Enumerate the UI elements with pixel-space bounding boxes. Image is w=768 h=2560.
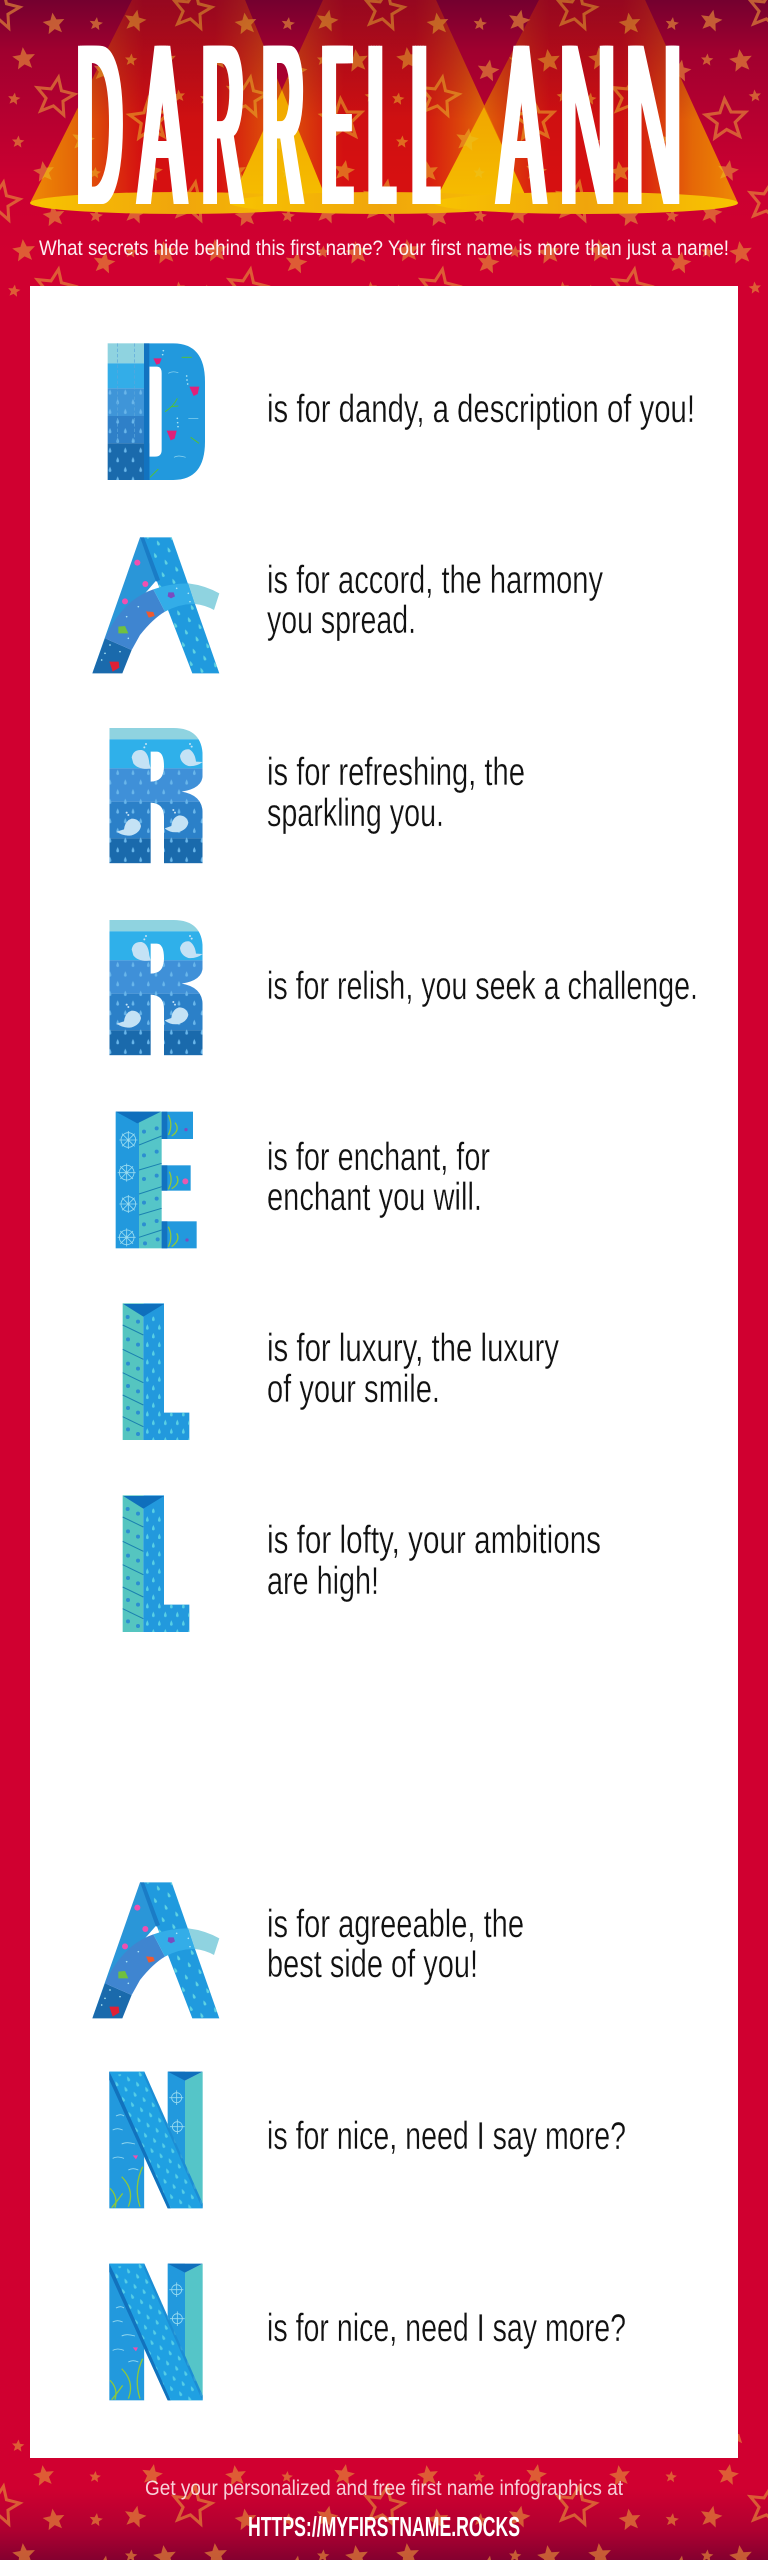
text: A: is for accord, the harmony <box>267 559 603 602</box>
text: E <box>267 1136 490 1219</box>
text: N: is for nice, need I say more? <box>267 2307 626 2350</box>
letter R illustration <box>109 728 203 863</box>
title: A <box>140 0 184 253</box>
text: E: is for enchant, for <box>267 1136 490 1179</box>
footer line: Get your personalized and free first name infographics at <box>145 2477 623 2500</box>
text: L <box>267 1327 559 1411</box>
text: A <box>267 1903 524 1986</box>
title: E <box>324 0 350 253</box>
title: A <box>499 0 543 253</box>
title: D <box>77 0 122 253</box>
title: R <box>203 0 243 253</box>
letter N illustration <box>109 2264 203 2400</box>
text: L: is for luxury, the luxury <box>267 1327 559 1370</box>
title: N <box>625 0 682 253</box>
text: A: you spread. <box>267 599 416 642</box>
title: L <box>414 0 437 253</box>
panel: white card <box>30 286 738 2458</box>
text: N: is for nice, need I say more? <box>267 2115 626 2158</box>
letter L illustration <box>123 1495 189 1632</box>
text: A <box>267 559 603 642</box>
title: L <box>370 0 393 253</box>
letter R illustration <box>109 920 203 1055</box>
footer url: HTTPS://MYFIRSTNAME.ROCKS <box>248 2511 520 2542</box>
text: R: sparkling you. <box>267 792 444 835</box>
text: A: is for agreeable, the <box>267 1903 524 1946</box>
text: L: are high! <box>267 1560 379 1603</box>
letter D illustration <box>108 343 205 480</box>
text: L <box>267 1519 601 1603</box>
text: E: enchant you will. <box>267 1176 482 1219</box>
text: R <box>267 751 525 835</box>
letter E illustration <box>116 1112 197 1248</box>
text: L: is for lofty, your ambitions <box>267 1519 601 1562</box>
text: A: best side of you! <box>267 1943 478 1986</box>
letter L illustration <box>123 1303 189 1440</box>
text: R: is for refreshing, the <box>267 751 525 794</box>
spotlights <box>0 0 768 214</box>
title: N <box>559 0 616 253</box>
text: L: of your smile. <box>267 1368 440 1411</box>
title: R <box>263 0 303 253</box>
title <box>77 0 682 253</box>
letter N illustration <box>109 2072 203 2208</box>
letter A illustration <box>92 537 219 673</box>
letter A illustration <box>92 1882 219 2018</box>
